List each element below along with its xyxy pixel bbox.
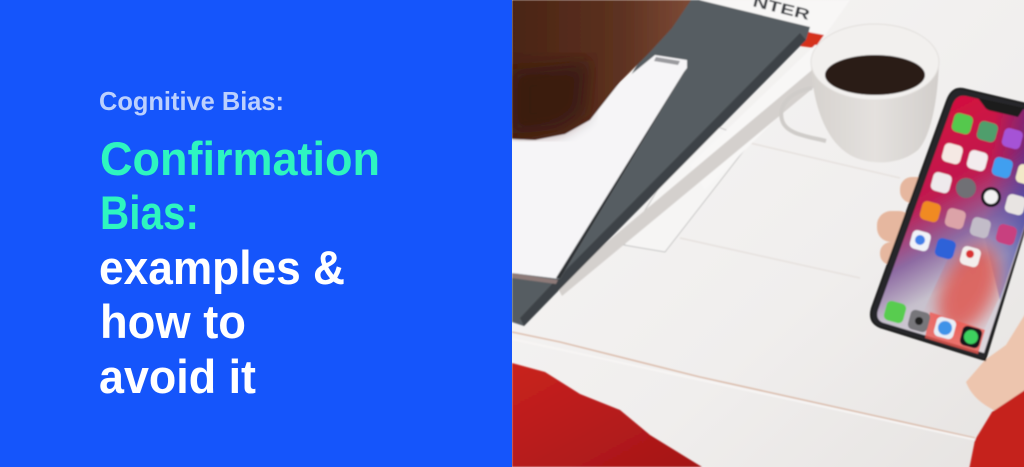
dock icons [883,300,983,349]
app icons [909,112,1024,268]
red tab [800,32,824,48]
light sheet beside notebook [726,44,818,154]
eyebrow: Cognitive Bias: Cognitive Bias: [99,86,284,116]
hair [512,0,691,140]
red sleeve right [968,390,1024,467]
notepad spiral [654,57,680,65]
notepad binding [512,273,558,284]
red shirt left [512,363,702,467]
phone body [871,89,1024,360]
title: Bias: [100,186,199,239]
cup body [811,62,939,162]
hand palm [966,315,1024,412]
screen tint [987,108,1024,300]
notch [978,98,1024,117]
title: how to [100,295,246,348]
white notepad [512,55,687,279]
white paper under notebook [624,126,742,253]
title [99,132,380,403]
panel: blue background [0,0,512,467]
title: examples & [99,241,345,294]
desk surface [512,0,1024,467]
phone [871,89,1024,360]
screen red glow [927,238,1009,334]
phone screen [877,96,1024,353]
paper sheet at top [690,0,850,45]
dock [925,312,985,354]
hair shading [512,60,590,134]
silver pen [556,70,818,296]
coffee [825,55,925,95]
title: avoid it [99,350,256,403]
cup rim [811,24,939,100]
cup handle [781,88,826,141]
dark notebook [512,0,810,326]
desk plank lines [512,143,1000,445]
title: Confirmation [100,132,380,185]
fingers [876,176,920,266]
coffee cup [781,24,939,162]
panel: desk photo [512,0,1024,467]
